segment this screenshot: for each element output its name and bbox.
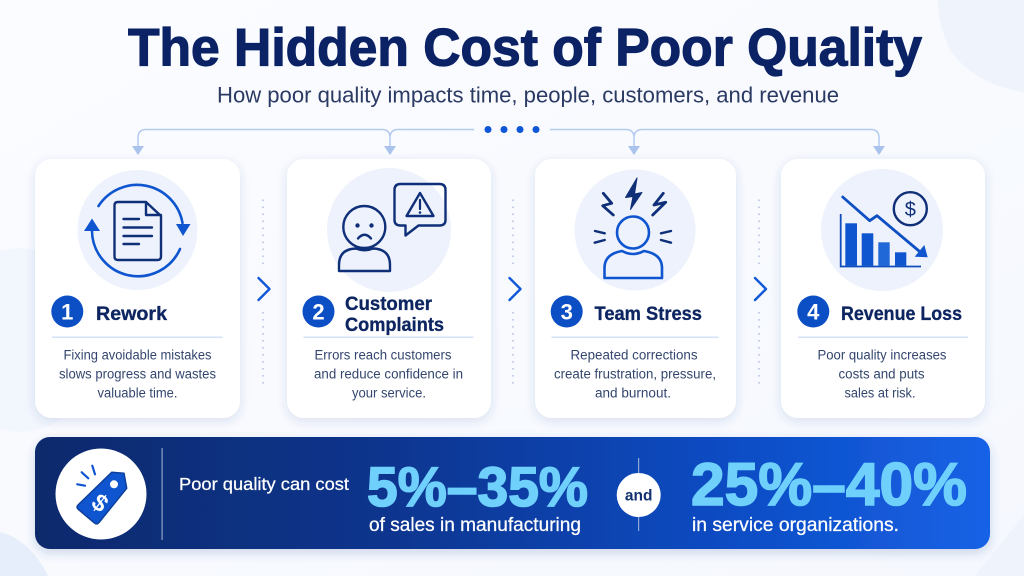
flow separator 2 [510,200,520,385]
text: rework: slows progress and wastes [59,366,216,382]
icon: falling revenue chart: $ [905,199,916,221]
badge 2: 2 [312,300,325,324]
heading: team stress: Team Stress [594,304,702,325]
heading: customer complaints [345,294,444,336]
subtitle: How poor quality impacts time, people, customers, and revenue [217,82,839,108]
flow separator 3 [755,200,766,385]
text: service: in service organizations. [692,515,899,536]
text: team stress [554,348,716,400]
connector arrows [132,126,885,155]
badge 4: 4 [807,300,820,324]
badge 3: 3 [561,300,573,324]
panel: rework [35,159,240,418]
panel: team stress [535,159,736,418]
text: revenue loss: costs and puts [838,366,925,382]
heading: revenue loss: Revenue Loss [841,304,962,325]
stat: manufacturing range: 5%–35% [367,456,588,518]
text: customer complaints: Errors reach customers [314,348,452,362]
text: rework: Fixing avoidable mistakes [64,348,212,362]
and connector: and [625,488,652,504]
title: The Hidden Cost of Poor Quality [128,18,922,78]
text: team stress: and burnout. [595,386,671,400]
stat: service range: 25%–40% [691,450,967,518]
icon: price tag with dollar: $ [86,489,114,519]
and connector [617,458,661,531]
panel: customer complaints [287,159,491,418]
text: revenue loss: Poor quality increases [818,348,947,362]
text: team stress: create frustration, pressure, [554,366,716,382]
heading: rework: Rework [96,304,167,325]
icon: rework document [84,185,190,276]
text: customer complaints [314,348,463,400]
text: customer complaints: and reduce confidence in [314,366,463,382]
text: rework [59,348,216,400]
badge 1 [51,296,83,328]
panel: revenue loss [781,159,985,418]
text: manufacturing: of sales in manufacturing [369,515,581,536]
heading: customer complaints: Complaints [345,315,444,336]
heading: customer complaints: Customer [345,294,433,315]
flow separator 1 [258,200,270,385]
icon: price tag with dollar [56,448,146,540]
badge 2 [302,296,334,328]
icon: stressed person [595,178,671,278]
text: lead-in: Poor quality can cost [179,474,349,494]
panel: cost banner [35,437,990,549]
text: rework: valuable time. [98,386,178,400]
text: revenue loss [818,348,947,400]
badge 1: 1 [61,300,73,324]
badge 3 [551,296,583,328]
icon: falling revenue chart [841,192,928,266]
text: team stress: Repeated corrections [570,348,698,362]
text: customer complaints: your service. [352,386,426,400]
badge 4 [797,296,829,328]
text: revenue loss: sales at risk. [844,386,916,400]
icon: unhappy customer with warning [339,184,446,271]
